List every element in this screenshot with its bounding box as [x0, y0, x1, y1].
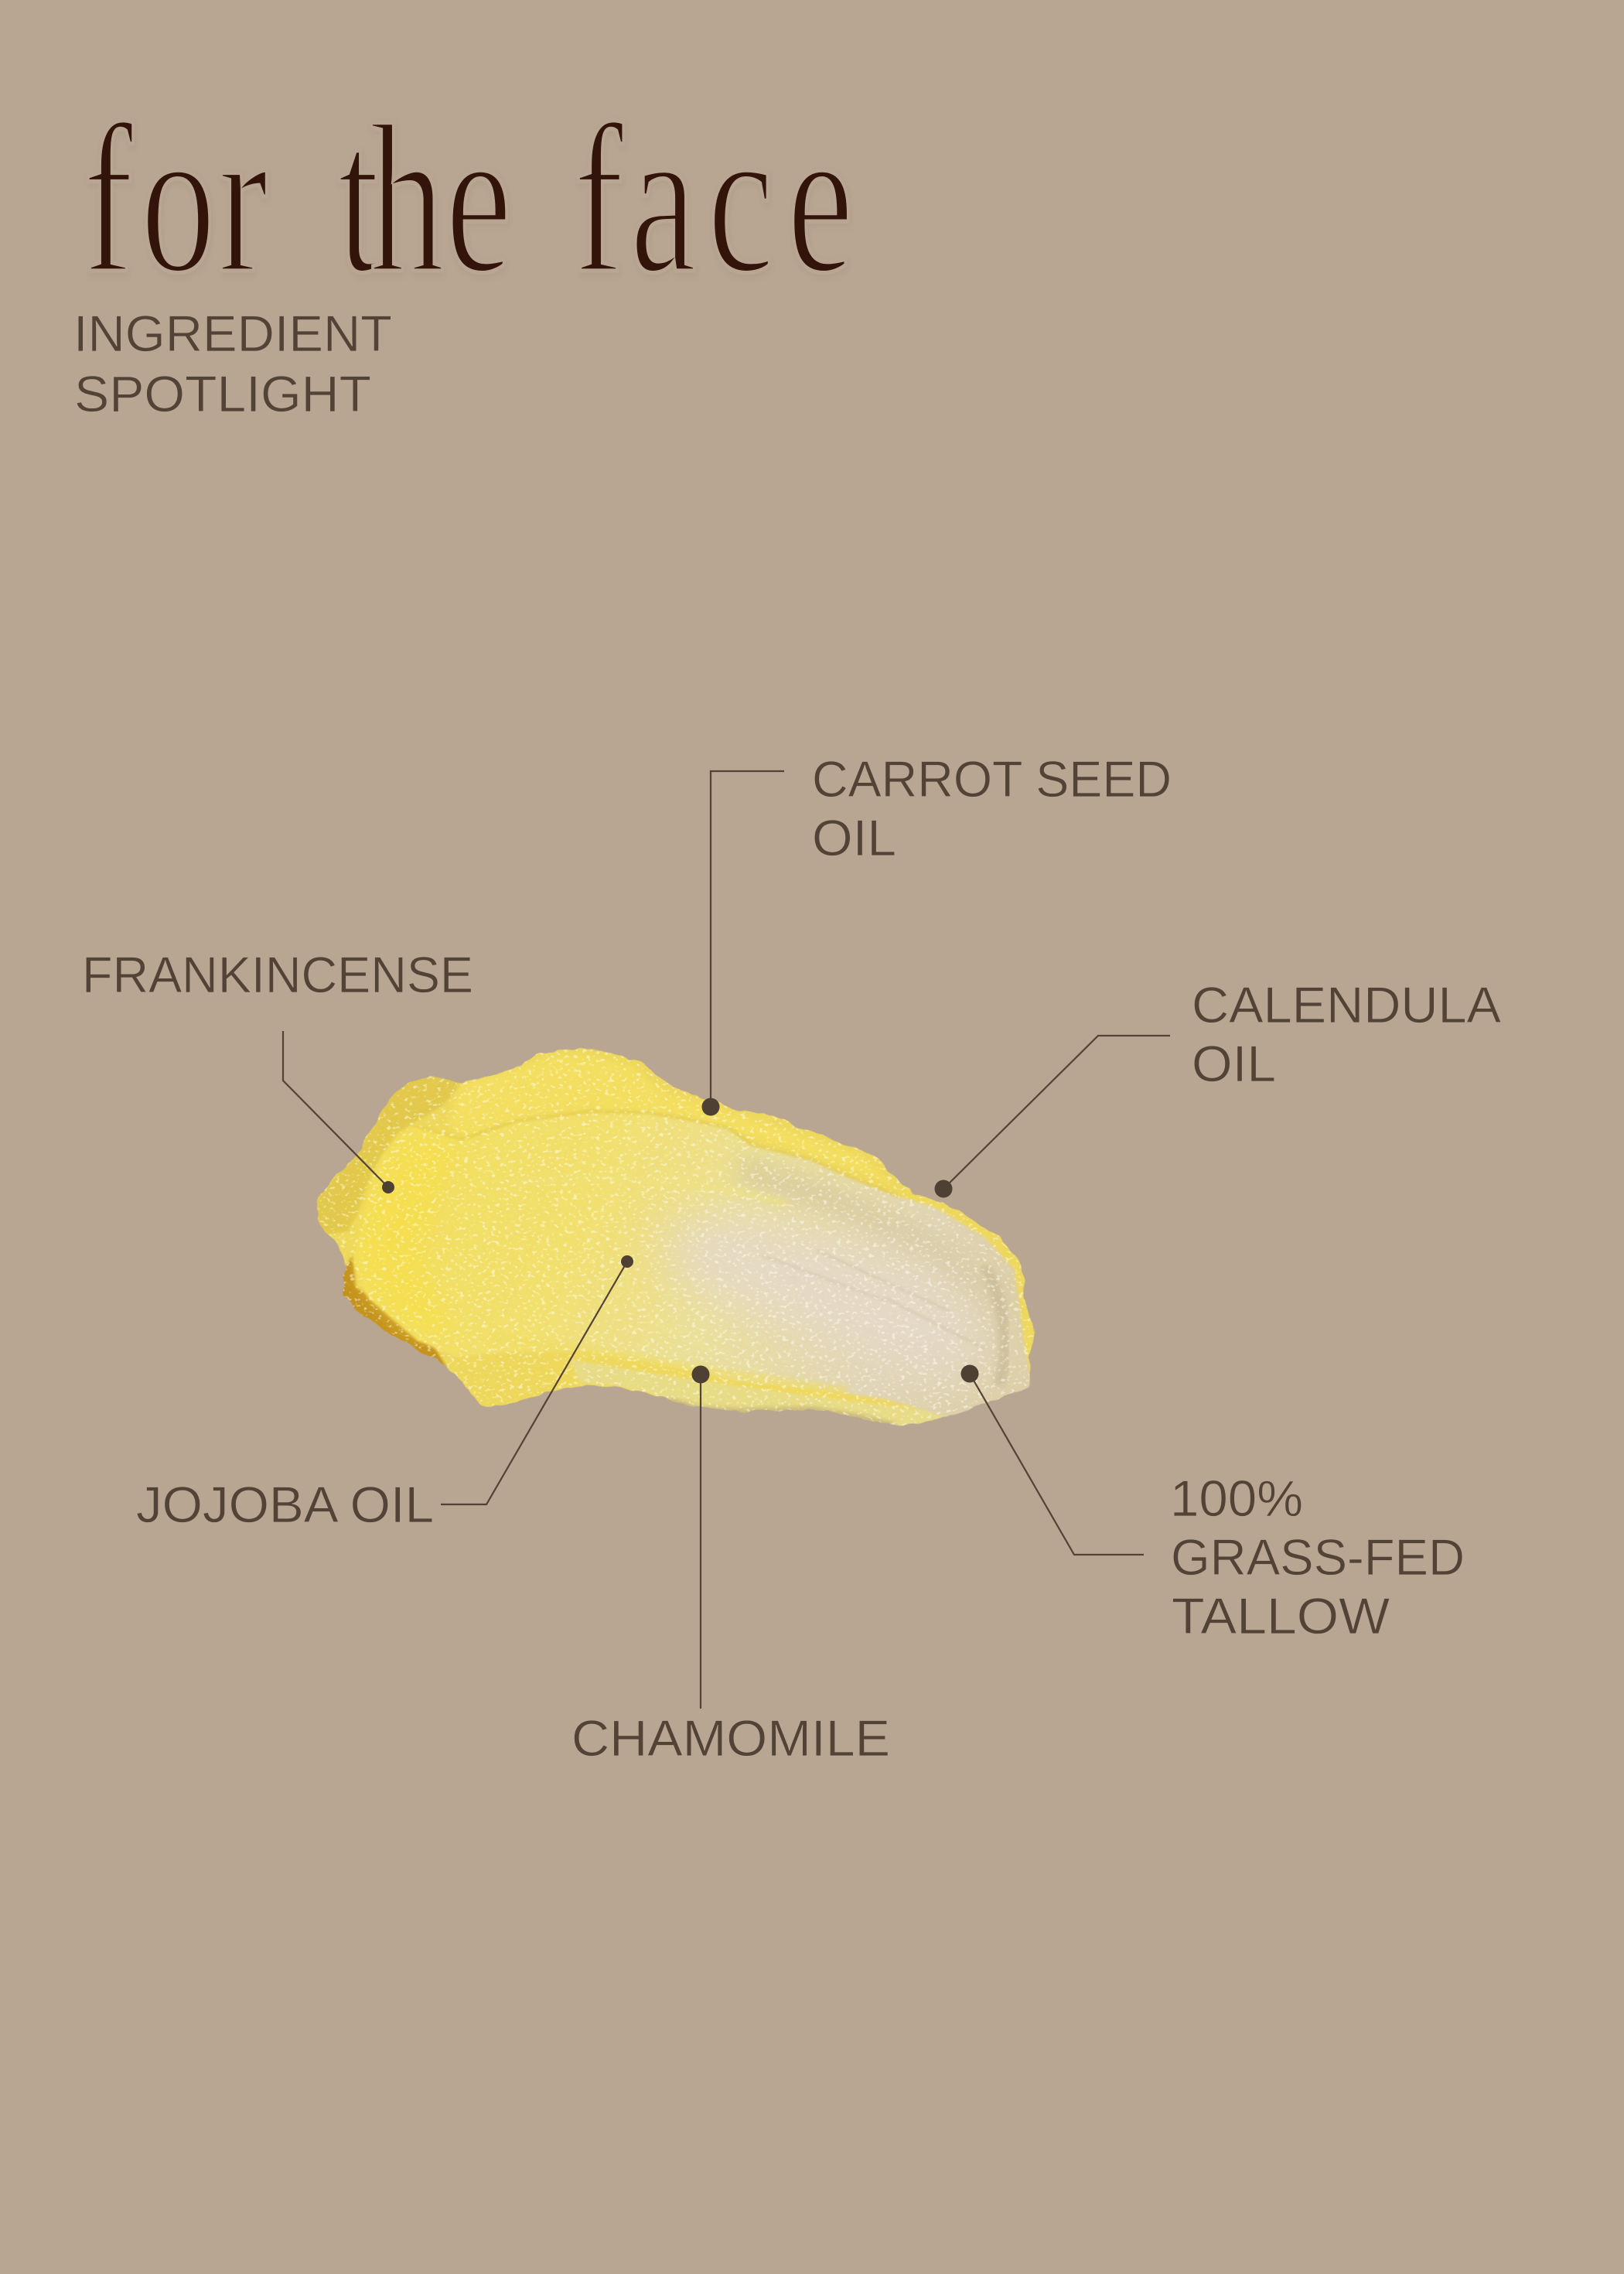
lower yellow fold [491, 1338, 846, 1391]
saturated left band [358, 1135, 462, 1338]
swatch shadow edge [342, 1256, 447, 1367]
outer ridge [326, 1047, 1035, 1411]
callout: jojoba oil: JOJOBA OIL [136, 1476, 434, 1533]
balm swatch [316, 1047, 1035, 1426]
top ridge highlight [447, 1056, 925, 1205]
sparkle texture [309, 1036, 1052, 1439]
pool upper edge shadow [412, 1111, 900, 1197]
bottom brown rim [669, 1401, 896, 1426]
callout: calendula oil: CALENDULA [1192, 976, 1501, 1033]
callout: carrot seed oil [702, 750, 1172, 1115]
left darker lobe [317, 1076, 459, 1234]
callout: frankincense: FRANKINCENSE [82, 946, 473, 1003]
subtitle [73, 305, 392, 422]
callout: 100% grass-fed tallow: 100% [1170, 1470, 1303, 1527]
brush streaks [763, 1250, 984, 1349]
callout: 100% grass-fed tallow: GRASS-FED [1171, 1528, 1465, 1586]
callout: chamomile [571, 1366, 890, 1767]
callout: jojoba oil [136, 1255, 633, 1533]
yellow arc in pool [516, 1178, 787, 1205]
tinted upper band [738, 1154, 1004, 1322]
subtitle: SPOTLIGHT [74, 365, 371, 422]
callout: frankincense [82, 946, 473, 1193]
callout: 100% grass-fed tallow: TALLOW [1172, 1587, 1390, 1644]
callout: calendula oil: OIL [1192, 1035, 1276, 1092]
callout: carrot seed oil: OIL [812, 809, 896, 866]
right edge tint [984, 1266, 1005, 1386]
callout: carrot seed oil: CARROT SEED [812, 750, 1172, 808]
bottom lip [570, 1358, 947, 1426]
callout: 100% grass-fed tallow [960, 1364, 1465, 1644]
callout: chamomile: CHAMOMILE [571, 1709, 890, 1767]
inner pool [353, 1111, 1034, 1418]
title: for the face [84, 80, 854, 317]
callout: calendula oil [934, 976, 1501, 1197]
pale centre [659, 1213, 989, 1388]
subtitle: INGREDIENT [73, 305, 392, 362]
